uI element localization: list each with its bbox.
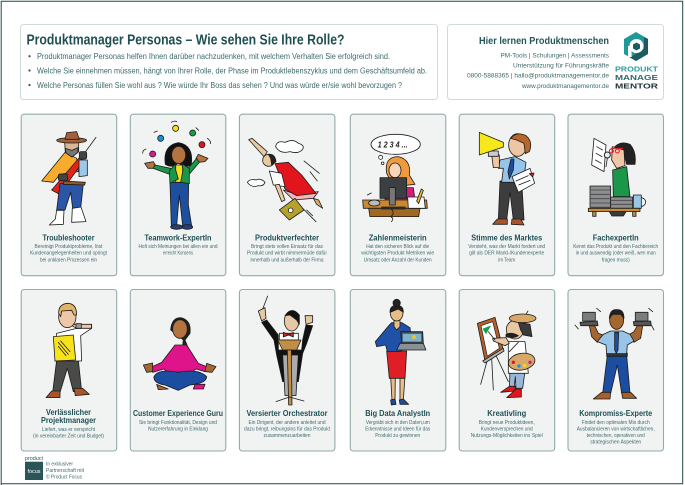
card description: innerhalb und außerhalb der Firma <box>250 257 324 263</box>
card description: Erkenntnisse und Ideen für das <box>365 427 430 433</box>
card: Produktverfechter <box>239 114 335 276</box>
contact details: www.produktmanagementor.de <box>521 83 609 90</box>
card description <box>244 420 330 439</box>
card description: Kundenversprechen und <box>481 427 533 433</box>
card description: Umsatz oder Anzahl der Kunden <box>364 257 432 263</box>
card title <box>41 408 96 425</box>
card description: Ausbalancieren von wirtschaftlichen, <box>577 427 655 433</box>
card description <box>365 420 430 439</box>
card description <box>468 244 545 263</box>
card title: Zahlenmeisterin <box>369 234 427 242</box>
card description: Holt sich Meinungen bei allen ein und <box>138 244 218 250</box>
illustration: data analyst <box>375 299 426 405</box>
card description: Nutzererfahrung in Einklang <box>148 426 208 432</box>
card: Versierter Orchestrator <box>239 290 335 451</box>
footer: product focus partner note: product <box>25 456 43 462</box>
card title: Teamwork-ExpertIn <box>144 234 212 242</box>
logo: MANAGE <box>615 73 658 82</box>
illustration: painter <box>477 311 536 398</box>
card: Customer Experience Guru <box>130 290 226 451</box>
card description <box>33 427 104 440</box>
bullet list: Welche Sie einnehmen müssen, hängt von Ihrer Rolle, der Phase im Produktlebenszyklus und dem Geschäftsumfeld ab. <box>37 66 427 76</box>
card description: Vergräbt sich in den Daten,um <box>366 420 430 426</box>
card: FachexpertIn <box>568 114 664 276</box>
footer: product focus partner note: © Product Focus <box>46 474 82 480</box>
card description: Findet den optimalen Mix durch <box>582 420 650 426</box>
card description: Bringt stets vollen Einsatz für das <box>251 244 323 250</box>
card description: zusammenzuarbeiten <box>264 433 310 439</box>
card description: Kennt das Produkt und den Fachbereich <box>573 244 658 250</box>
illustration: numbers woman at desk <box>363 134 427 222</box>
card title: Verlässlicher <box>46 408 91 417</box>
card description <box>139 420 217 432</box>
card: Zahlenmeisterin <box>350 114 446 276</box>
footer: product focus partner note <box>25 456 85 480</box>
illustration: conductor <box>258 296 313 405</box>
card description: im Team <box>498 257 516 263</box>
logo <box>615 32 659 90</box>
card description <box>471 420 543 439</box>
logo: MENTOR <box>615 81 659 90</box>
card: Stimme des Marktes <box>459 114 555 276</box>
card description: Bringt neue Produktideen, <box>479 420 535 426</box>
card description: strategischen Aspekten <box>590 439 641 445</box>
card description <box>30 244 107 263</box>
card description: Bereinigt Produktprobleme, löst <box>34 244 103 250</box>
card: Big Data AnalystIn <box>350 290 446 451</box>
card: Verlässlicher Projektmanager <box>21 290 117 451</box>
illustration: numbers woman at desk: 1 2 3 4 ... <box>378 140 408 149</box>
card description <box>247 244 327 263</box>
contact details: PM-Tools | Schulungen | Assessments <box>500 52 610 60</box>
card: Kreativling <box>459 290 555 451</box>
card description <box>573 244 658 263</box>
card: Kompromiss-Experte <box>568 290 664 451</box>
illustration: flying hero <box>247 138 323 222</box>
card description: wichtigsten Produkt Metriken wie <box>360 251 434 257</box>
card description: Hat den sicheren Blick auf die <box>366 244 429 250</box>
bullet list: Produktmanager Personas helfen Ihnen darüber nachzudenken, mit welchem Verhalten Sie erfolgreich sind. <box>37 52 390 61</box>
card: Troubleshooter <box>21 114 117 276</box>
card description <box>360 244 434 263</box>
card title: Stimme des Marktes <box>471 234 543 242</box>
card description: Produkt zu gewinnen <box>375 433 420 439</box>
title: Produktmanager Personas – Wie sehen Sie Ihre Rolle? <box>26 32 345 48</box>
card description: dazu bringt, reibungslos für das Produkt <box>244 427 330 433</box>
card description <box>138 244 218 257</box>
contact heading: Hier lernen Produktmenschen <box>479 35 609 47</box>
card description: (in vereinbarter Zeit und Budget) <box>33 434 104 440</box>
card title: Troubleshooter <box>42 234 94 242</box>
header panel <box>20 24 438 100</box>
illustration: meditating guru <box>143 318 216 390</box>
card title: Versierter Orchestrator <box>246 409 328 418</box>
card description: bei unklaren Prozessen ein <box>40 257 97 263</box>
contact details: 0800-5888365 | hallo@produktmanagementor.de <box>467 73 609 80</box>
logo: PRODUKT <box>615 65 658 74</box>
card title: Projektmanager <box>41 416 96 425</box>
card title: Customer Experience Guru <box>133 409 223 418</box>
footer: product focus partner note: Partnerschaft mit <box>46 468 85 474</box>
card description: Ein Dirigent, der andere anleitet und <box>248 420 326 426</box>
footer: product focus partner note: focus <box>28 469 41 475</box>
card description: technischen, operativen und <box>587 433 645 439</box>
contact details: Unterstützung für Führungskräfte <box>513 62 609 70</box>
card title: Produktverfechter <box>255 234 319 242</box>
card description: Kundenangelegenheiten und springt <box>30 251 107 257</box>
illustration: juggler <box>143 121 211 229</box>
illustration: expert reading <box>588 138 646 216</box>
card description: gilt als DER Markt-/Kundenexperte <box>469 251 544 257</box>
illustration: man with megaphone <box>479 132 535 225</box>
contact details <box>467 52 610 90</box>
card description: fragen muss) <box>602 257 630 263</box>
card title: Kreativling <box>487 409 526 418</box>
illustration: project manager <box>46 303 92 398</box>
card: Teamwork-ExpertIn <box>130 114 226 276</box>
card title: Big Data AnalystIn <box>365 409 430 418</box>
card description <box>577 420 655 445</box>
footer: product focus partner note: In exklusiver <box>46 462 73 468</box>
card description: in und auswendig (oder weiß, wen man <box>576 251 656 257</box>
illustration: troubleshooter <box>42 132 96 225</box>
illustration: balancing man <box>575 308 654 399</box>
card description: Produkt und wirbt nimmermüde dafür <box>247 251 327 257</box>
card title: Kompromiss-Experte <box>579 409 653 418</box>
card description: erreicht Konsens <box>163 251 193 257</box>
card description: Sie bringt Funktionalität, Design und <box>139 420 217 426</box>
card title: FachexpertIn <box>593 234 639 242</box>
bullet list: Welche Personas füllen Sie wohl aus ? Wie würde Ihr Boss das sehen ? Und was würde er/sie wohl bevorzugen ? <box>37 81 402 90</box>
bullet list <box>28 52 427 90</box>
card description: Liefert, was er verspricht <box>42 427 95 433</box>
card description: Versteht, was der Markt fordert und <box>468 244 545 250</box>
contact panel <box>448 24 664 100</box>
card description: Nutzungs-Möglichkeiten ins Spiel <box>471 433 543 439</box>
